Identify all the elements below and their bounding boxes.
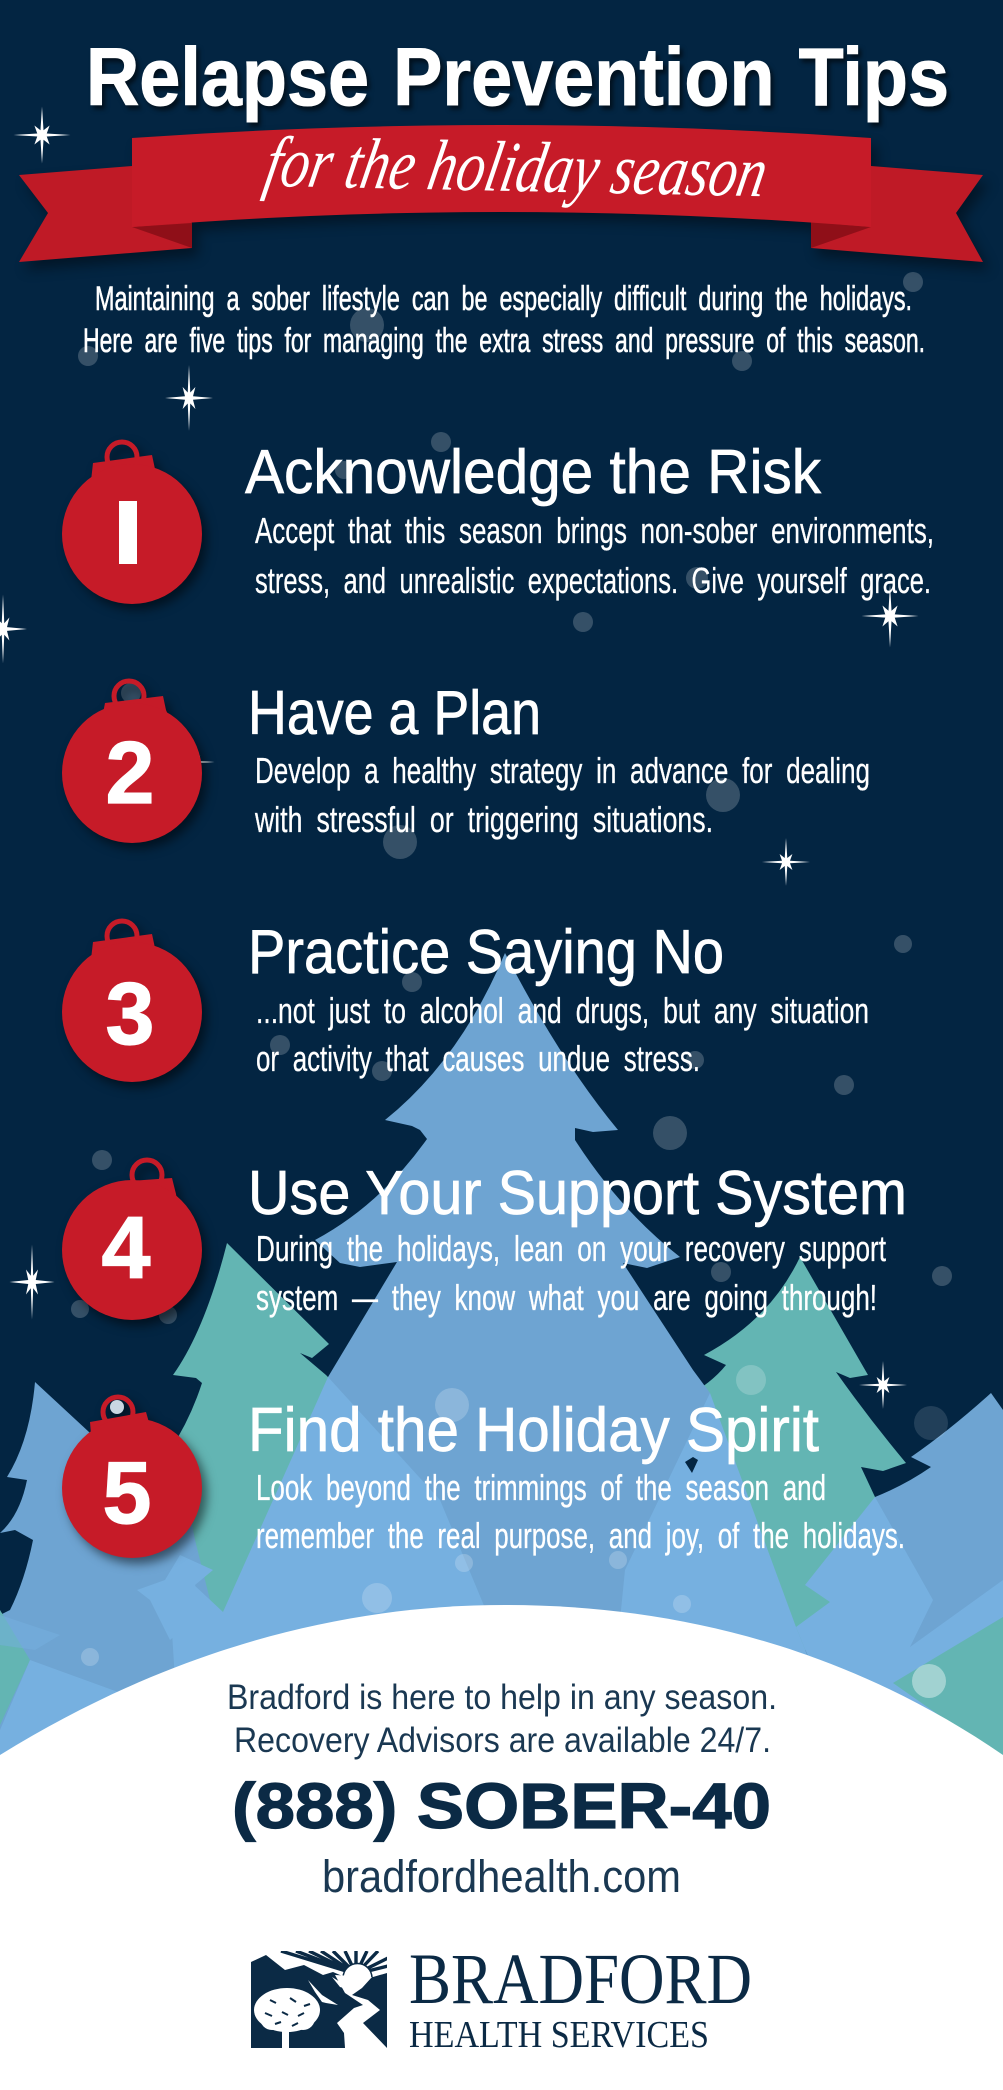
body 3 xyxy=(256,990,869,1079)
river xyxy=(335,1975,387,2048)
ornament 5 xyxy=(62,1397,202,1558)
central big tree xyxy=(315,953,710,1620)
heading 1: Acknowledge the Risk xyxy=(245,438,822,507)
left blue tree xyxy=(0,1382,250,1760)
small faint tree at left edge xyxy=(0,1615,60,1650)
heading 4: Use Your Support System xyxy=(248,1159,907,1228)
body 3: or activity that causes undue stress. xyxy=(256,1038,700,1079)
ribbon centre xyxy=(132,125,871,227)
tip 2 xyxy=(62,679,870,843)
snow hill xyxy=(0,1605,1003,2090)
left ribbon tail xyxy=(19,166,192,262)
heading 5: Find the Holiday Spirit xyxy=(248,1396,819,1465)
body 4 xyxy=(256,1228,886,1318)
ornament 4: 4 xyxy=(102,1198,151,1297)
body 1 xyxy=(255,510,934,601)
subtitle: for the holiday season xyxy=(259,122,775,212)
ribbon banner xyxy=(19,125,983,262)
footer message: Recovery Advisors are available 24/7. xyxy=(234,1721,771,1760)
right light blue tree xyxy=(796,1497,1003,1760)
tip 3 xyxy=(62,918,869,1082)
left teal tree xyxy=(100,1243,450,1650)
ornament 1: 1 xyxy=(104,484,152,583)
tree illustration xyxy=(0,953,1003,1760)
body 2 xyxy=(254,750,870,840)
sun xyxy=(343,1963,372,1978)
heading 3: Practice Saying No xyxy=(248,918,724,987)
logo icon xyxy=(251,1951,392,2048)
falling snow bubbles xyxy=(71,272,952,1698)
ornament 2 xyxy=(62,681,202,843)
footer message xyxy=(227,1678,777,1760)
footer message: Bradford is here to help in any season. xyxy=(227,1678,777,1717)
tree xyxy=(254,1988,320,2048)
left corner teal xyxy=(0,1610,30,1725)
right ribbon tail xyxy=(811,166,983,262)
right ribbon fold xyxy=(811,222,871,248)
birds xyxy=(308,1977,342,2005)
sun rays xyxy=(280,1951,387,1972)
tip 1 xyxy=(62,438,934,604)
ornament 2: 2 xyxy=(106,723,154,822)
logo: HEALTH SERVICES xyxy=(409,2014,709,2056)
small light tree over left blue xyxy=(137,1555,213,1640)
website: bradfordhealth.com xyxy=(322,1851,681,1902)
tree speckles xyxy=(265,1998,310,2026)
left ribbon fold xyxy=(132,223,192,248)
ornament 3 xyxy=(62,921,202,1082)
sparkles xyxy=(0,106,918,1409)
ornament 1 xyxy=(62,442,202,604)
intro text xyxy=(83,280,925,360)
phone number: (888) SOBER-40 xyxy=(232,1770,771,1842)
right teal tree xyxy=(680,1257,1003,1650)
left corner light tree xyxy=(0,1660,140,1760)
tip 5 xyxy=(62,1396,905,1558)
logo xyxy=(251,1951,750,2048)
right blue tree xyxy=(875,1393,1003,1647)
navy gap in trees xyxy=(685,1457,698,1473)
wordmark: BRADFORD xyxy=(409,1939,752,2019)
body 2: with stressful or triggering situations. xyxy=(254,799,713,840)
ornament 5: 5 xyxy=(103,1443,151,1542)
lower light blue tree xyxy=(137,1377,850,1760)
ornament 4 xyxy=(62,1160,202,1320)
right teal corner xyxy=(893,1617,1003,1760)
body 5 xyxy=(256,1467,905,1556)
ornament 3: 3 xyxy=(106,964,154,1063)
tip 4 xyxy=(62,1159,907,1320)
sky xyxy=(251,1951,387,1978)
heading 2: Have a Plan xyxy=(248,679,541,748)
